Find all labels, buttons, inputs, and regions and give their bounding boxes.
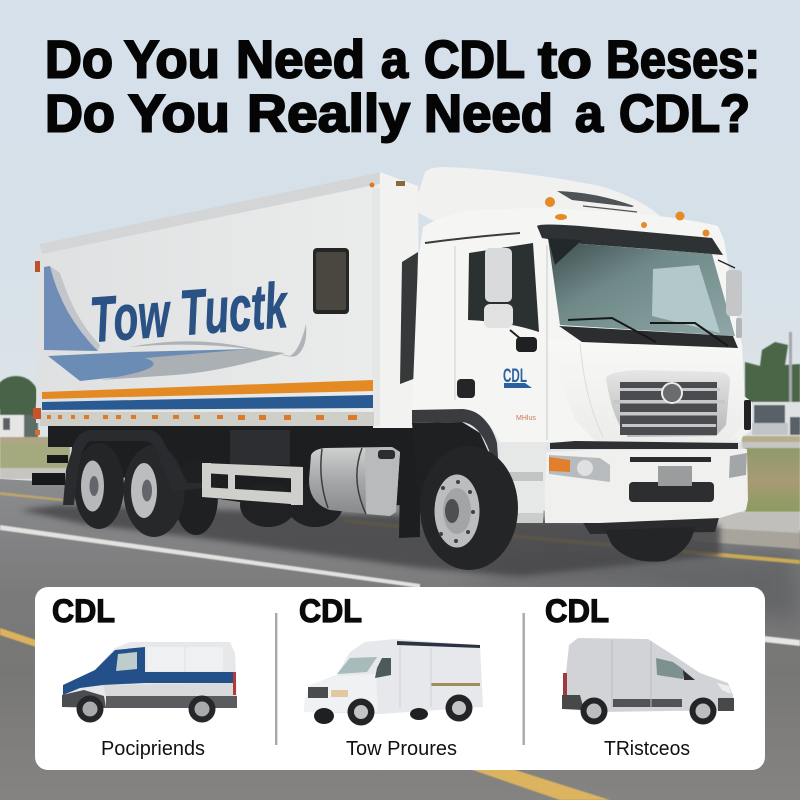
title: Really: [247, 84, 411, 144]
windshield: [548, 238, 735, 336]
background: road shading: [460, 549, 800, 625]
title: a: [381, 30, 408, 90]
front bumper: [543, 441, 748, 523]
title: to: [538, 30, 592, 90]
roof fairing: [413, 167, 660, 224]
lower intake: [629, 482, 714, 502]
wheel well shadow: [412, 422, 497, 513]
item 2 label: Tow Proures: [346, 738, 457, 760]
title: Do: [45, 84, 115, 144]
grille emblem: [662, 383, 682, 403]
mud flap: [399, 428, 420, 538]
box logo text: Tow Tuctk: [88, 269, 292, 356]
windshield lower trim and wipers: [559, 318, 738, 348]
swoosh graphic: [44, 266, 306, 381]
left headlight: [549, 455, 610, 482]
cab door: [425, 233, 603, 440]
box window: [313, 248, 349, 314]
number plate: [658, 466, 692, 486]
background: right scenery: [742, 332, 800, 512]
item 1 van: blue and white: [62, 642, 237, 722]
orange stripe: [42, 380, 373, 399]
title: [45, 30, 760, 144]
right mirror: [718, 260, 742, 338]
right side marker frame: [730, 396, 752, 440]
title: CDL?: [619, 84, 750, 144]
under bumper shadow: [580, 514, 720, 534]
item 3 label: TRistceos: [604, 738, 690, 760]
item 2 van: white box van: [304, 639, 483, 726]
title: Beses:: [606, 30, 760, 90]
background: sky: [0, 0, 800, 480]
rear wheels: [74, 443, 218, 537]
title: Need: [236, 30, 365, 90]
chassis: [48, 425, 420, 512]
side mirror: [484, 248, 537, 352]
door logo: CDL: [503, 366, 527, 387]
item 1 heading: CDL: [52, 593, 115, 629]
door small print: MHlus: [516, 415, 536, 422]
cargo box: [33, 172, 420, 435]
radiator grille: [606, 370, 730, 437]
bumper slot: [630, 457, 711, 462]
truck: [20, 167, 752, 576]
roof vent: [557, 191, 634, 207]
door window: [468, 243, 539, 332]
title: a: [575, 84, 603, 144]
title: CDL: [424, 30, 525, 90]
cab steps: [499, 442, 547, 523]
lower rail: [40, 412, 374, 426]
background: curb and road markings: [0, 492, 800, 800]
cab body: [412, 208, 746, 442]
cab gap vent: [400, 252, 418, 384]
sun visor: [537, 224, 723, 255]
item 3 heading: CDL: [545, 593, 609, 629]
ground shadow: [20, 505, 720, 576]
panel: vehicle comparison: [35, 587, 765, 770]
background: road: [0, 479, 800, 800]
marker lights: [47, 415, 357, 420]
front wheel arch: [412, 409, 502, 513]
side step frame: [202, 463, 303, 505]
item 1 label: Pocipriends: [101, 738, 205, 760]
fuel tank: [309, 447, 400, 516]
far front wheel: [605, 527, 695, 562]
door handle: [457, 379, 475, 398]
rear mudguard: [63, 430, 205, 505]
title: Need: [424, 84, 553, 144]
title: You: [124, 30, 220, 90]
item 2 heading: CDL: [299, 593, 362, 629]
front wheel: [420, 446, 518, 570]
wheels behind fuel tank: [240, 483, 343, 527]
roof marker lights: [545, 197, 710, 236]
blue stripe: [42, 395, 373, 410]
item 3 van: grey van: [562, 638, 734, 724]
title: Do: [45, 30, 113, 90]
title: You: [128, 84, 230, 144]
background: left scenery: [0, 376, 70, 479]
right headlight: [729, 453, 747, 478]
